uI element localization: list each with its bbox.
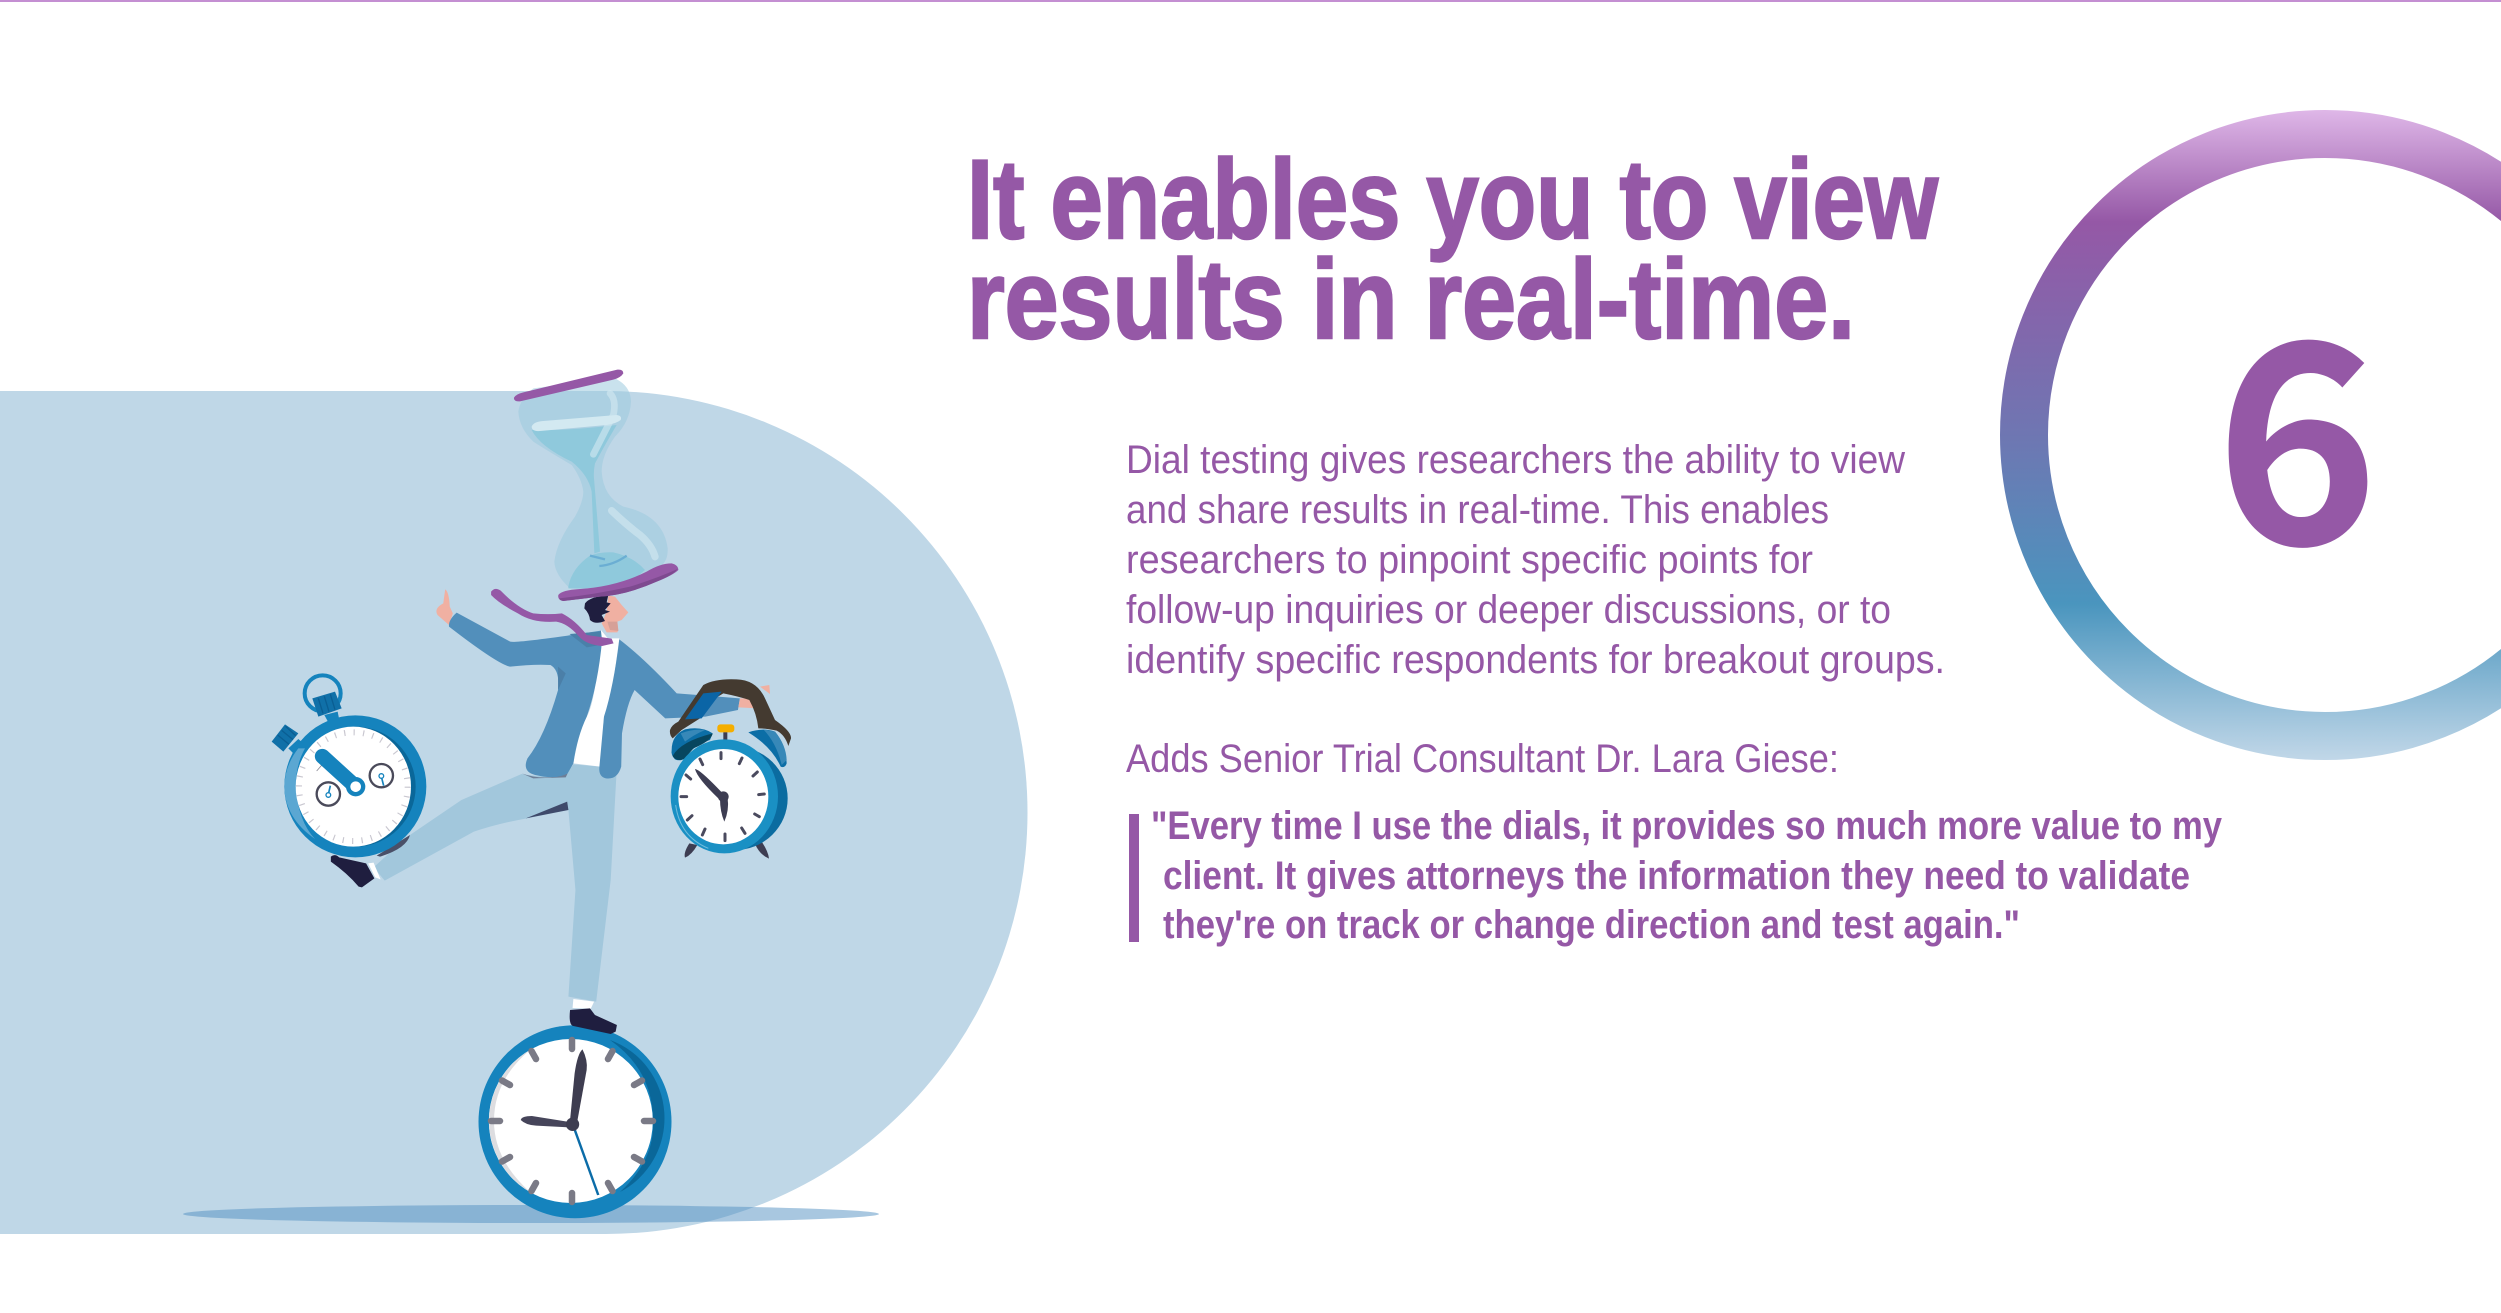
icon: stopwatch [272, 675, 426, 857]
circle badge: number 6 [2024, 134, 2501, 736]
title: It enables you to view [967, 137, 1939, 262]
background panel: rounded light blue shape [0, 391, 1028, 1234]
quote text: client. It gives attorneys the information they need to validate [1163, 854, 2190, 898]
necktie [491, 589, 614, 646]
body text: Dial testing gives researchers the ability to view [1126, 438, 1905, 482]
body text: researchers to pinpoint specific points for [1126, 538, 1813, 582]
trousers [331, 764, 617, 1034]
figure: businessman [331, 589, 740, 1034]
number: 6 [2215, 223, 2379, 625]
gradient ring [2024, 134, 2501, 736]
title: results in real-time. [967, 237, 1855, 362]
quote text: "Every time I use the dials, it provides so much more value to my [1151, 804, 2222, 848]
body text: and share results in real-time. This enables [1126, 488, 1829, 532]
ground shadow [183, 1205, 879, 1223]
icon: large wall clock under foot [478, 1025, 672, 1218]
head [584, 595, 628, 632]
quote text: they're on track or change direction and test again." [1163, 903, 2020, 947]
quote bar [1129, 814, 1139, 942]
quote text [1151, 804, 2222, 947]
attribution line: Adds Senior Trial Consultant Dr. Lara Giese: [1126, 737, 1839, 781]
body text: follow-up inquiries or deeper discussions, or to [1126, 588, 1891, 632]
body text [1126, 438, 1945, 682]
icon: hourglass [514, 370, 678, 601]
title [967, 137, 1939, 362]
torso and arms [436, 589, 740, 779]
icon: alarm clock carried by hand [670, 679, 791, 859]
body text: identify specific respondents for breakout groups. [1126, 638, 1945, 682]
illustration: businessman balancing clocks [272, 370, 791, 1218]
